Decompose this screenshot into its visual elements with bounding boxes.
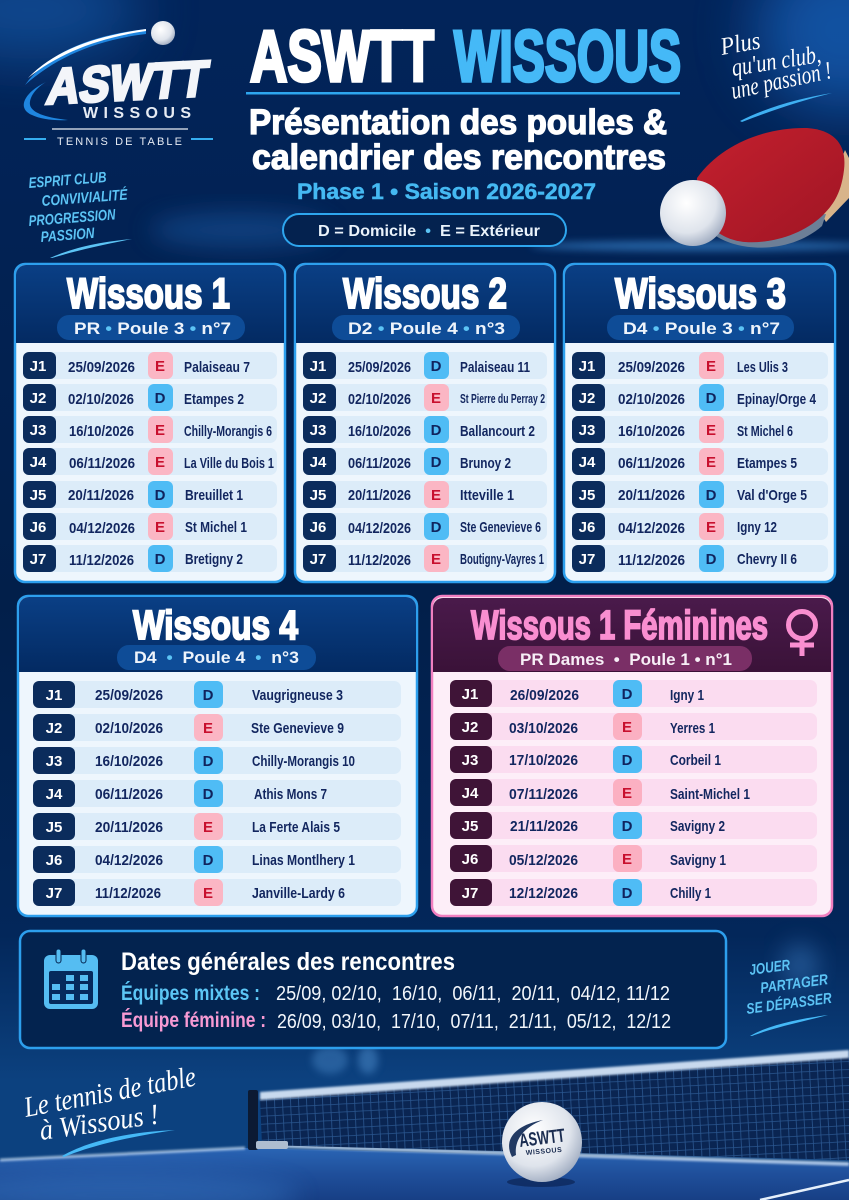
row J2: Ste Genevieve 9 — [251, 720, 344, 737]
row J2: 02/10/2026 — [68, 391, 134, 408]
row J4: Saint-Michel 1 — [670, 786, 750, 803]
row J7: J7 — [30, 551, 46, 568]
row J2: 03/10/2026 — [509, 720, 578, 737]
row J1: 26/09/2026 — [510, 687, 579, 704]
panel: general dates — [20, 931, 726, 1048]
legend pill: D = Domicile • E = Extérieur — [318, 223, 540, 240]
row J6 — [303, 513, 547, 540]
row J5: J5 — [46, 819, 62, 836]
row J1: D — [203, 687, 214, 704]
values list — [28, 169, 129, 246]
main title: WISSOUS — [454, 17, 681, 97]
side motto: JOUER — [748, 957, 791, 979]
row J2: J2 — [46, 720, 62, 737]
mixed team dates — [121, 982, 670, 1005]
row J1: Palaiseau 7 — [184, 359, 250, 376]
logo subtitle: WISSOUS — [83, 105, 191, 122]
row J1: Vaugrigneuse 3 — [252, 687, 343, 704]
row J1: D — [622, 686, 633, 703]
row J3 — [23, 416, 277, 443]
row J2: J2 — [579, 390, 595, 407]
row J5 — [572, 481, 828, 508]
row J5: Breuillet 1 — [185, 487, 243, 504]
row J1: 25/09/2026 — [95, 687, 163, 704]
row J2: Yerres 1 — [670, 720, 715, 737]
row J1: D — [431, 358, 442, 375]
row J1: 25/09/2026 — [618, 359, 685, 376]
bottom slogan — [21, 1061, 198, 1147]
row J7: 11/12/2026 — [95, 885, 161, 902]
row J3 — [572, 416, 828, 443]
row J3: J3 — [579, 422, 595, 439]
row J4: J4 — [46, 786, 63, 803]
row J7: Janville-Lardy 6 — [252, 885, 345, 902]
row J1: 25/09/2026 — [348, 359, 411, 376]
row J6 — [33, 846, 401, 873]
motto underline — [750, 1015, 828, 1036]
row J4: 06/11/2026 — [348, 455, 411, 472]
row J6: E — [706, 519, 716, 536]
row J4: E — [622, 785, 632, 802]
row J2: 02/10/2026 — [95, 720, 163, 737]
row J3: J3 — [462, 752, 478, 769]
row J2 — [303, 384, 547, 411]
row J7: 12/12/2026 — [509, 885, 578, 902]
row J4: D — [203, 786, 214, 803]
paddle icon — [697, 128, 849, 248]
slogan: Plus — [717, 27, 762, 61]
row J6: D — [431, 519, 442, 536]
row J5: D — [155, 487, 166, 504]
panel: Wissous 1 — [15, 264, 285, 582]
heading: Wissous 3 — [615, 270, 786, 318]
row J7: J7 — [310, 551, 326, 568]
row J7: 11/12/2026 — [348, 552, 411, 569]
row J7: J7 — [579, 551, 595, 568]
side motto: PARTAGER — [759, 971, 829, 997]
row J5: J5 — [310, 487, 326, 504]
row J2: J2 — [462, 719, 478, 736]
row J6: Linas Montlhery 1 — [252, 852, 355, 869]
row J7: 11/12/2026 — [618, 552, 685, 569]
row J4: La Ville du Bois 1 — [184, 455, 274, 472]
row J3: 16/10/2026 — [618, 423, 685, 440]
row J4: Brunoy 2 — [460, 455, 511, 472]
row J1: Les Ulis 3 — [737, 359, 788, 376]
row J5: 21/11/2026 — [510, 818, 578, 835]
row J4 — [450, 779, 817, 806]
row J3: D — [431, 422, 442, 439]
row J6 — [23, 513, 277, 540]
row J3: D — [203, 753, 214, 770]
slogan underline — [740, 93, 832, 122]
row J4 — [23, 448, 277, 475]
row J7: Chevry II 6 — [737, 551, 797, 568]
row J4: Athis Mons 7 — [254, 786, 327, 803]
division pill: D2 • Poule 4 • n°3 — [348, 319, 505, 338]
row J5: E — [431, 487, 441, 504]
logo — [24, 21, 213, 148]
row J2: J2 — [310, 390, 326, 407]
row J4: E — [155, 454, 165, 471]
row J6: St Michel 1 — [185, 519, 247, 536]
row J7: Boutigny-Vayres 1 — [460, 551, 544, 568]
row J1: Igny 1 — [670, 687, 704, 704]
slogan underline — [62, 1130, 175, 1157]
mixed team dates: Équipes mixtes : — [121, 982, 260, 1005]
values list: PASSION — [40, 225, 96, 246]
row J1 — [23, 352, 277, 379]
row J2: E — [431, 390, 441, 407]
table surface — [0, 1146, 849, 1200]
row J7: J7 — [46, 885, 62, 902]
row J6: 04/12/2026 — [348, 520, 411, 537]
row J3: Chilly-Morangis 6 — [184, 423, 272, 440]
row J7: D — [706, 551, 717, 568]
row J1: J1 — [462, 686, 478, 703]
row J5: 20/11/2026 — [348, 487, 411, 504]
row J7: E — [431, 551, 441, 568]
women's team dates: 26/09, 03/10, 17/10, 07/11, 21/11, 05/12, 12/12 — [277, 1011, 671, 1033]
phase line: Phase 1 • Saison 2026-2027 — [297, 179, 596, 204]
row J7: J7 — [462, 885, 478, 902]
row J6: J6 — [46, 852, 62, 869]
row J2: D — [155, 390, 166, 407]
row J6: J6 — [30, 519, 46, 536]
row J2 — [23, 384, 277, 411]
row J5: 20/11/2026 — [95, 819, 163, 836]
row J7: E — [203, 885, 213, 902]
row J2: D — [706, 390, 717, 407]
row J1 — [572, 352, 828, 379]
panel: Wissous 1 Féminines — [432, 596, 832, 916]
row J3: J3 — [46, 753, 62, 770]
ball with logo: WISSOUS — [526, 1147, 562, 1157]
row J5: J5 — [30, 487, 46, 504]
division pill — [607, 315, 794, 340]
row J7 — [33, 879, 401, 906]
mixed team dates: 25/09, 02/10, 16/10, 06/11, 20/11, 04/12, 11/12 — [276, 983, 670, 1005]
row J5: 20/11/2026 — [618, 487, 685, 504]
row J3: J3 — [30, 422, 46, 439]
logo tagline: TENNIS DE TABLE — [57, 136, 182, 148]
row J3: 16/10/2026 — [95, 753, 163, 770]
logo name: ASWTT — [43, 50, 212, 115]
row J7 — [303, 545, 547, 572]
values list: CONVIVIALITÉ — [41, 186, 129, 210]
row J6: E — [622, 851, 632, 868]
row J4: J4 — [462, 785, 479, 802]
row J4: Etampes 5 — [737, 455, 797, 472]
row J6 — [450, 845, 817, 872]
row J4: E — [706, 454, 716, 471]
row J3: E — [706, 422, 716, 439]
division pill: D4 • Poule 4 • n°3 — [134, 648, 299, 667]
row J5: La Ferte Alais 5 — [252, 819, 340, 836]
row J3 — [303, 416, 547, 443]
row J7: Bretigny 2 — [185, 551, 243, 568]
row J5: Val d'Orge 5 — [737, 487, 807, 504]
row J3: St Michel 6 — [737, 423, 793, 440]
division pill — [332, 315, 520, 340]
row J6: Ste Genevieve 6 — [460, 519, 541, 536]
row J7: Chilly 1 — [670, 885, 711, 902]
row J2: St Pierre du Perray 2 — [460, 391, 545, 406]
logo swoosh — [25, 29, 146, 85]
row J5 — [303, 481, 547, 508]
women's team dates — [121, 1009, 671, 1033]
women's team dates: Équipe féminine : — [121, 1009, 266, 1032]
row J3: 17/10/2026 — [509, 752, 578, 769]
row J3 — [33, 747, 401, 774]
values list: ESPRIT CLUB — [28, 169, 107, 192]
row J5: E — [203, 819, 213, 836]
row J1: J1 — [30, 358, 46, 375]
row J6: J6 — [310, 519, 326, 536]
row J3: Ballancourt 2 — [460, 423, 535, 440]
row J2: Epinay/Orge 4 — [737, 391, 817, 408]
heading: Dates générales des rencontres — [121, 948, 455, 976]
row J7 — [450, 879, 817, 906]
row J5: J5 — [462, 818, 478, 835]
row J1: E — [155, 358, 165, 375]
ball with logo: ASWTT — [518, 1125, 567, 1152]
subtitle: calendrier des rencontres — [252, 138, 666, 177]
main title: ASWTT — [250, 17, 434, 97]
row J1 — [450, 680, 817, 707]
row J6: 04/12/2026 — [618, 520, 685, 537]
row J5: 20/11/2026 — [68, 487, 134, 504]
row J5: D — [622, 818, 633, 835]
slogan: qu'un club, — [730, 41, 823, 82]
row J3: D — [622, 752, 633, 769]
ball icon — [660, 180, 726, 246]
main title — [250, 17, 681, 97]
row J3: E — [155, 422, 165, 439]
values list: PROGRESSION — [28, 206, 117, 230]
row J4: J4 — [579, 454, 596, 471]
row J6: 04/12/2026 — [95, 852, 163, 869]
row J6: J6 — [462, 851, 478, 868]
row J4 — [303, 448, 547, 475]
panel: Wissous 2 — [295, 264, 555, 582]
row J2: 02/10/2026 — [618, 391, 685, 408]
row J6: J6 — [579, 519, 595, 536]
row J1: J1 — [310, 358, 326, 375]
division pill — [498, 646, 752, 671]
row J5: D — [706, 487, 717, 504]
row J7: 11/12/2026 — [69, 552, 134, 569]
row J2: E — [203, 720, 213, 737]
row J1: 25/09/2026 — [68, 359, 135, 376]
row J3: Chilly-Morangis 10 — [252, 753, 355, 770]
row J6: 04/12/2026 — [69, 520, 135, 537]
icon: calendar — [44, 949, 98, 1009]
row J4 — [572, 448, 828, 475]
row J7: D — [622, 885, 633, 902]
panel: Wissous 3 — [564, 264, 835, 582]
row J4: 06/11/2026 — [95, 786, 163, 803]
row J1: J1 — [46, 687, 62, 704]
row J3: Corbeil 1 — [670, 752, 721, 769]
row J3: 16/10/2026 — [348, 423, 411, 440]
row J1: E — [706, 358, 716, 375]
row J2 — [572, 384, 828, 411]
row J6: 05/12/2026 — [509, 852, 578, 869]
row J3: 16/10/2026 — [69, 423, 134, 440]
row J2: Etampes 2 — [184, 391, 244, 408]
legend pill — [283, 214, 566, 246]
bottom slogan: à Wissous ! — [38, 1099, 161, 1147]
row J5 — [450, 812, 817, 839]
row J2: 02/10/2026 — [348, 391, 411, 408]
row J4: 06/11/2026 — [69, 455, 135, 472]
values underline — [50, 239, 132, 258]
row J5 — [33, 813, 401, 840]
row J1 — [303, 352, 547, 379]
row J4: J4 — [30, 454, 47, 471]
subtitle — [249, 103, 667, 177]
division pill — [57, 315, 245, 340]
row J6: Savigny 1 — [670, 852, 726, 869]
bottom slogan: Le tennis de table — [21, 1061, 198, 1124]
row J2 — [33, 714, 401, 741]
row J3 — [450, 746, 817, 773]
division pill: PR Dames • Poule 1 • n°1 — [520, 650, 732, 669]
row J4: 06/11/2026 — [618, 455, 685, 472]
row J6 — [572, 513, 828, 540]
row J2 — [450, 713, 817, 740]
net — [248, 1050, 849, 1160]
subtitle: Présentation des poules & — [249, 103, 667, 142]
row J2: J2 — [30, 390, 46, 407]
row J2: E — [622, 719, 632, 736]
row J7 — [572, 545, 828, 572]
heading: Wissous 1 — [67, 270, 230, 318]
division pill: D4 • Poule 3 • n°7 — [623, 319, 780, 338]
row J1 — [33, 681, 401, 708]
row J5: Itteville 1 — [460, 487, 514, 504]
row J7 — [23, 545, 277, 572]
row J1: J1 — [579, 358, 595, 375]
row J4: 07/11/2026 — [509, 786, 578, 803]
side motto — [745, 957, 833, 1018]
row J4: D — [431, 454, 442, 471]
heading: Wissous 4 — [133, 602, 298, 648]
icon: logo ball — [151, 21, 175, 45]
row J6: Igny 12 — [737, 519, 777, 536]
row J6: D — [203, 852, 214, 869]
row J4 — [33, 780, 401, 807]
row J3: J3 — [310, 422, 326, 439]
row J1: Palaiseau 11 — [460, 359, 530, 376]
slogan — [717, 27, 834, 105]
ball with logo — [502, 1102, 582, 1187]
division pill — [117, 645, 316, 670]
icon: female symbol — [788, 612, 816, 656]
heading: Wissous 2 — [343, 270, 507, 318]
row J5: Savigny 2 — [670, 818, 725, 835]
division pill: PR • Poule 3 • n°7 — [74, 319, 231, 338]
row J5 — [23, 481, 277, 508]
panel: Wissous 4 — [18, 596, 417, 916]
row J4: J4 — [310, 454, 327, 471]
row J5: J5 — [579, 487, 595, 504]
row J7: D — [155, 551, 166, 568]
title underline — [246, 92, 680, 94]
row J6: E — [155, 519, 165, 536]
